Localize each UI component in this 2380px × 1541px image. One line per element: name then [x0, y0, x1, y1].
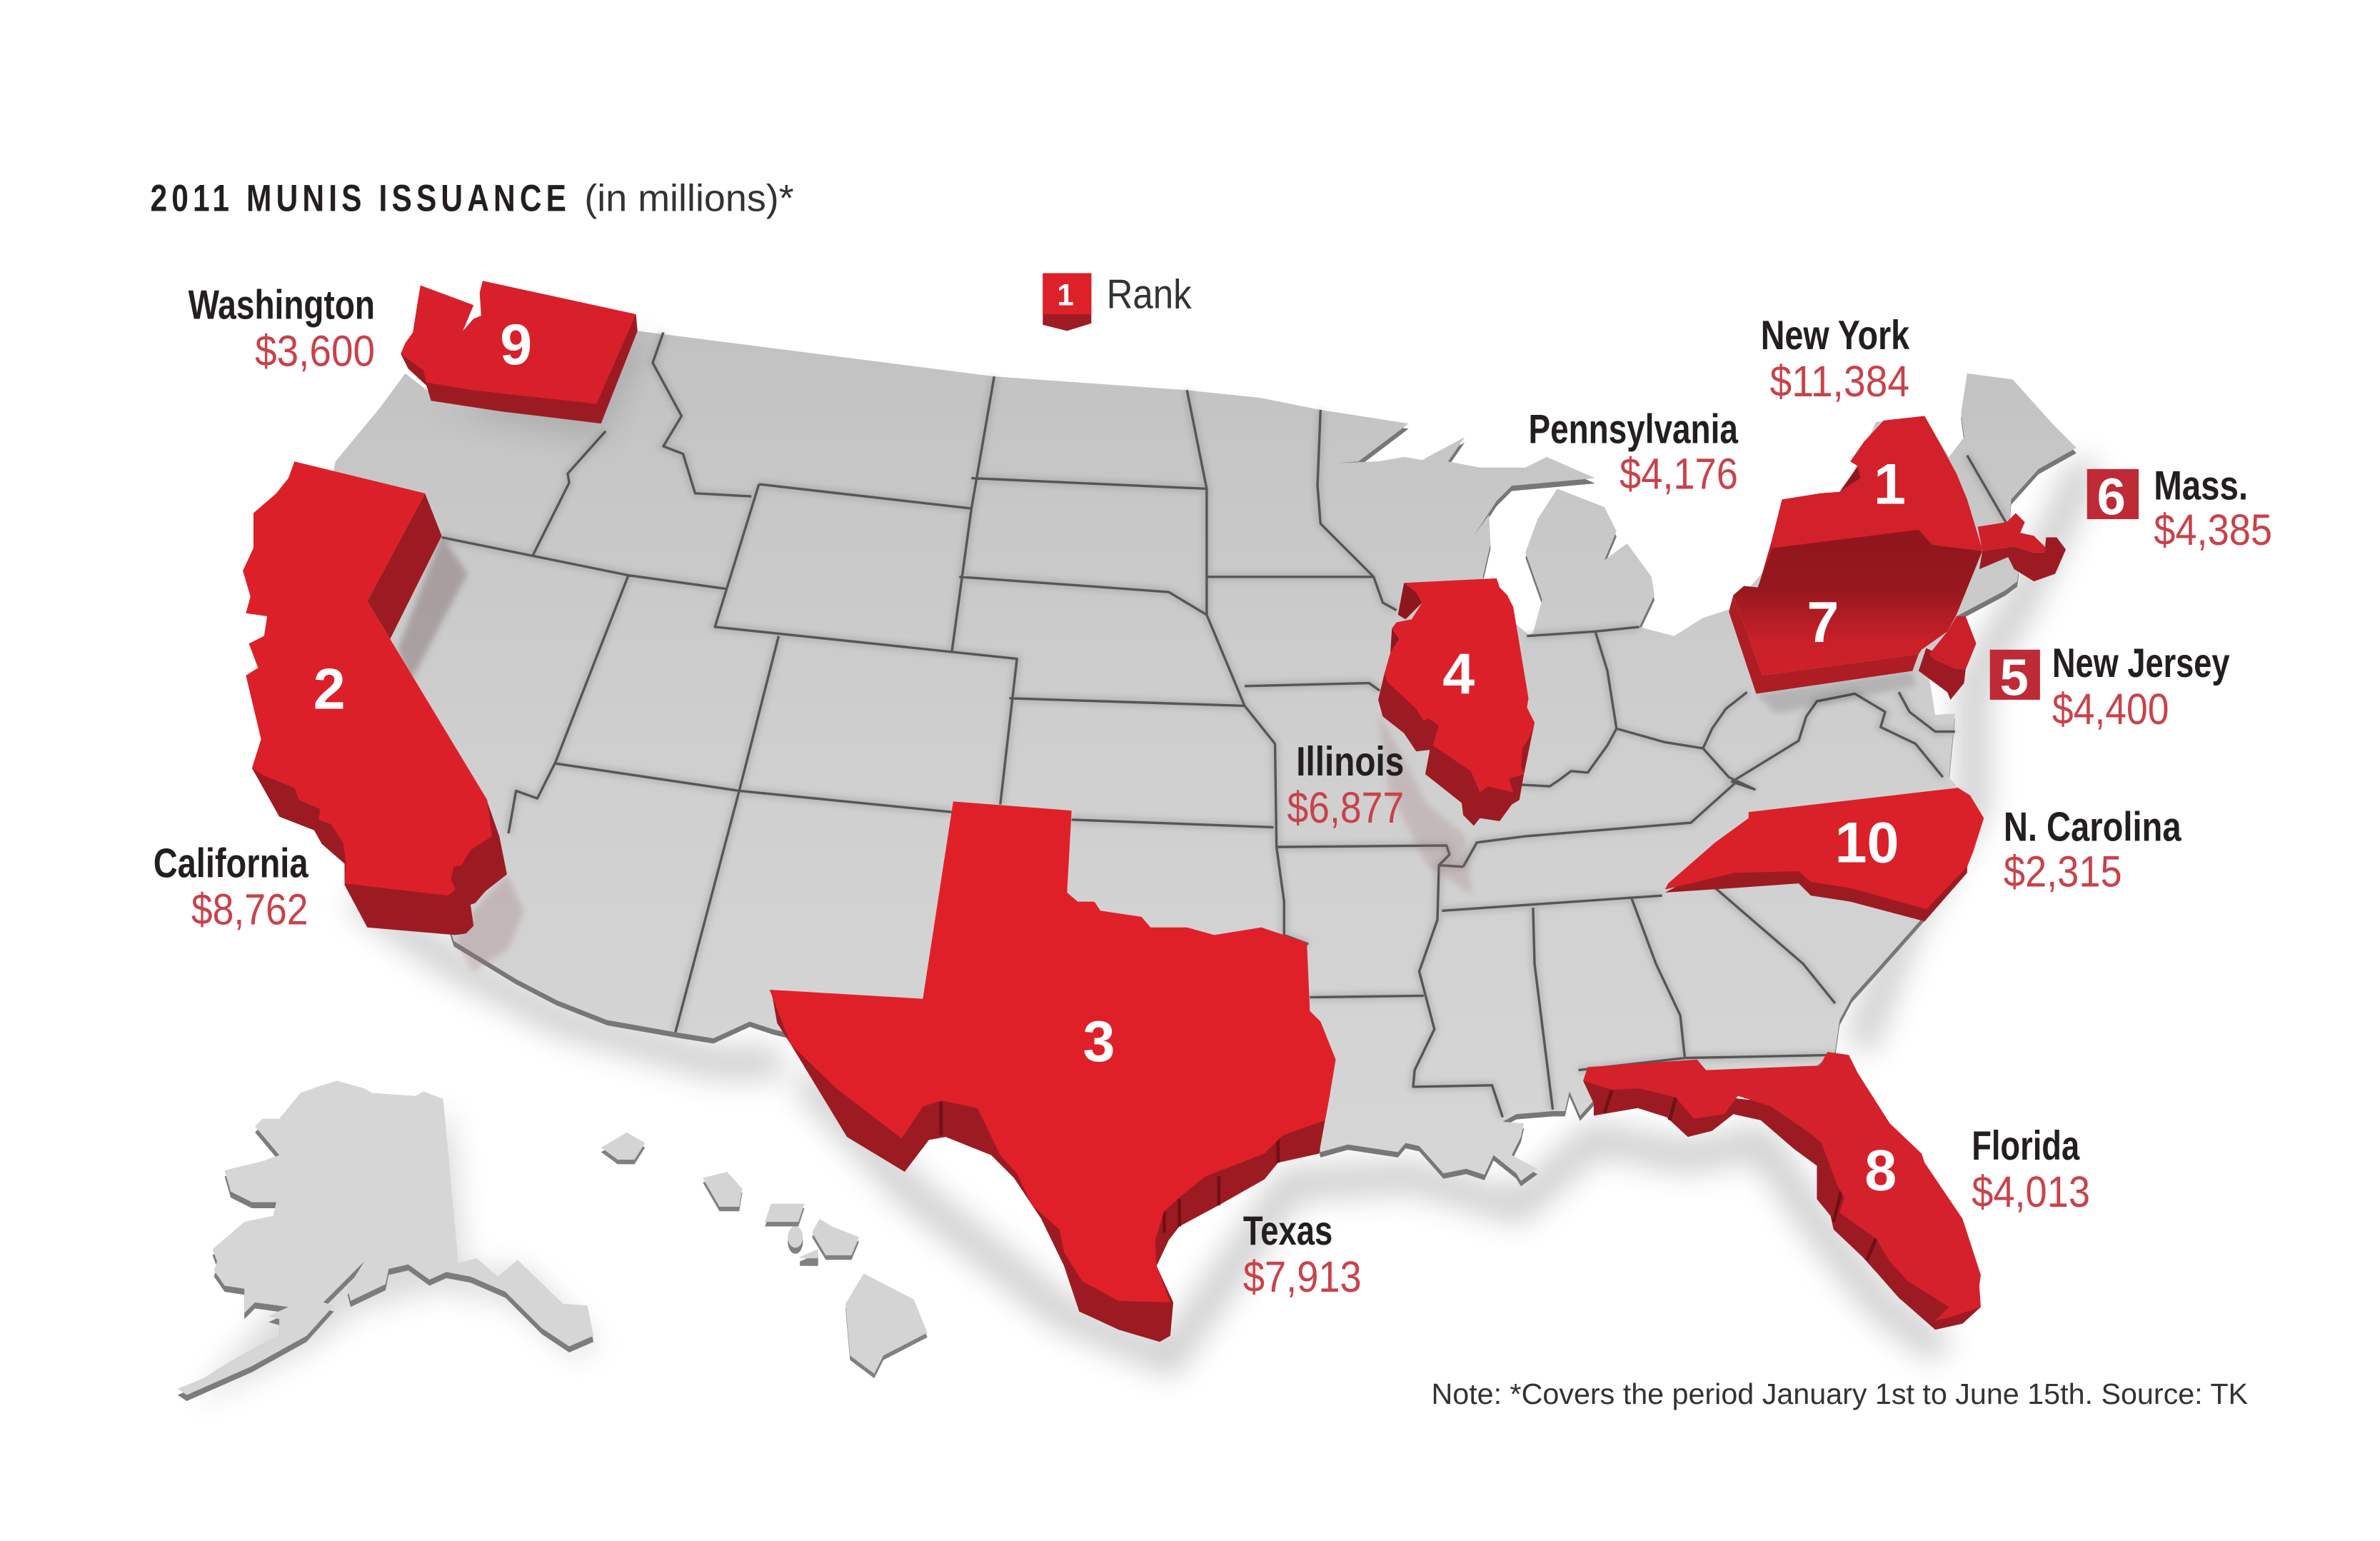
title [150, 177, 794, 220]
label: New Jersey: $4,400 [2052, 685, 2169, 734]
label: Pennsylvania [1529, 407, 1739, 498]
badge: rank 6: 6 [2097, 469, 2126, 526]
label: North Carolina: N. Carolina [2004, 805, 2181, 850]
label: Pennsylvania: Pennsylvania [1529, 407, 1739, 453]
state: Texas, rank 3 [770, 801, 1336, 1342]
label: North Carolina: $2,315 [2004, 847, 2122, 896]
map: Alaska [178, 1080, 600, 1404]
label: California: California [154, 841, 308, 887]
label: Massachusetts: $4,385 [2154, 506, 2272, 555]
state: California, rank 2: 2 [313, 658, 346, 722]
map: contiguous US base [303, 331, 2087, 1358]
label: Texas [1243, 1208, 1362, 1302]
state: Washington, rank 9: 9 [500, 313, 532, 377]
state: Illinois, rank 4: 4 [1442, 642, 1475, 706]
legend swatch [1043, 273, 1091, 331]
label: New York [1761, 313, 1909, 406]
label: New York: New York [1761, 313, 1909, 358]
label: California: $8,762 [191, 885, 308, 935]
label: Illinois [1287, 739, 1404, 833]
legend swatch: 1 [1057, 278, 1074, 312]
label: Washington: Washington [189, 282, 375, 328]
title: 2011 MUNIS ISSUANCE [150, 177, 571, 220]
state: Texas, rank 3: 3 [1083, 1010, 1115, 1074]
state: Illinois, rank 4 [1378, 578, 1535, 895]
label: Texas: $7,913 [1243, 1253, 1362, 1302]
state: New York, rank 1 [1757, 416, 1982, 589]
label: Florida: $4,013 [1972, 1168, 2090, 1217]
state: Florida, rank 8: 8 [1864, 1139, 1897, 1203]
state: Washington, rank 9 [401, 281, 645, 440]
label: Illinois: $6,877 [1287, 783, 1404, 833]
label: Florida [1972, 1123, 2090, 1217]
state: California, rank 2 [243, 461, 523, 971]
label: New Jersey [1990, 641, 2230, 734]
label: Massachusetts: Mass. [2154, 463, 2248, 508]
label: Pennsylvania: $4,176 [1620, 449, 1738, 498]
state: Massachusetts, rank 6 [1978, 513, 2066, 581]
label: Washington: $3,600 [255, 326, 375, 376]
label: New Jersey: New Jersey [2052, 641, 2230, 686]
legend: rank [1043, 272, 1192, 331]
footnote: Note: *Covers the period January 1st to June 15th. Source: TK [1431, 1377, 2248, 1410]
label: Texas: Texas [1243, 1208, 1332, 1254]
state: North Carolina, rank 10 [1665, 788, 1984, 921]
label: North Carolina [2004, 805, 2181, 896]
label: Florida: Florida [1972, 1123, 2080, 1169]
label: California [154, 841, 308, 935]
label: Illinois: Illinois [1296, 739, 1404, 785]
map: Hawaii islands [601, 1133, 928, 1378]
state: North Carolina, rank 10: 10 [1835, 810, 1899, 875]
state: Pennsylvania, rank 7 [1729, 530, 1982, 713]
state: Pennsylvania, rank 7: 7 [1807, 591, 1839, 655]
title: (in millions)* [584, 177, 794, 219]
label: New York: $11,384 [1769, 357, 1909, 406]
state: New Jersey, rank 5 [1919, 616, 1977, 700]
state: New York, rank 1: 1 [1874, 453, 1906, 517]
label: Washington [189, 282, 375, 376]
badge: rank 5: 5 [2000, 650, 2029, 707]
badge: rank 5 [1990, 650, 2040, 707]
badge: rank 6 [2087, 469, 2139, 526]
legend label: Rank [1107, 272, 1192, 318]
state: Florida, rank 8 [1583, 1052, 1981, 1330]
label: Massachusetts [2087, 463, 2272, 555]
